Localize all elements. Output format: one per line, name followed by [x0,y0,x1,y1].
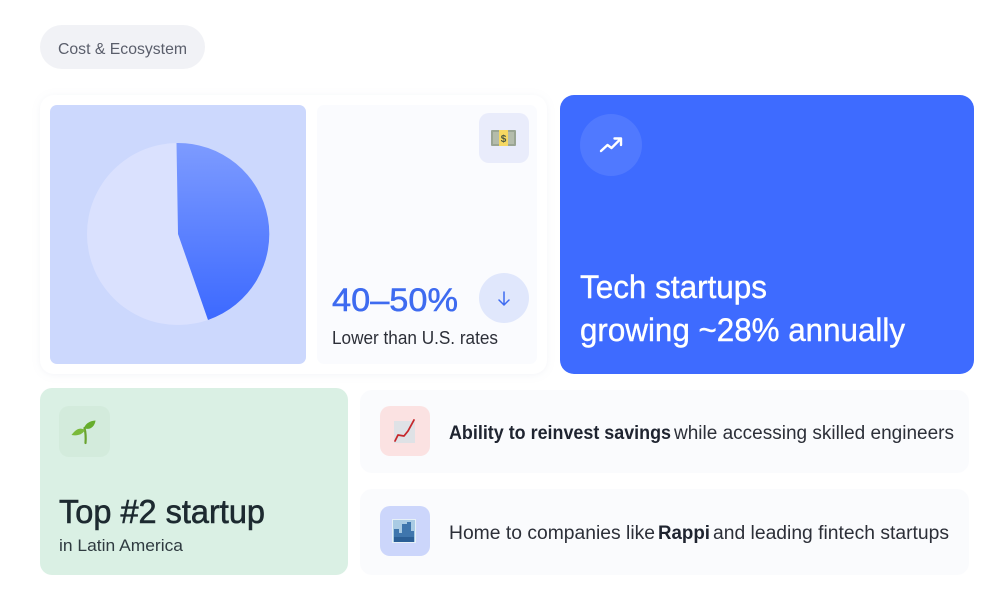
subheading: in Latin America [59,536,184,555]
headline: Tech startups [580,269,767,305]
headline: Top #2 startup [59,493,265,530]
text: and leading fintech startups [713,523,949,544]
headline [580,269,905,348]
panel: savings stat [317,105,537,364]
icon: trending up [580,114,642,176]
panel: top startup ranking [40,388,348,575]
text: Rappi [658,523,710,544]
stat caption: Lower than U.S. rates [332,328,498,348]
icon: banknote: $ [501,134,507,145]
icon: seedling [59,406,110,457]
category pill: Cost & Ecosystem [58,41,187,58]
panel: pie chart background [50,105,306,364]
panel: tech startups growth [560,95,974,374]
headline: growing ~28% annually [580,312,905,348]
panel: reinvest savings [360,390,969,473]
icon: chart [380,406,430,456]
text: while accessing skilled engineers [673,423,954,444]
icon: banknote [479,113,529,163]
text [449,523,949,544]
pie chart [87,143,269,325]
category pill [40,25,205,69]
text: Ability to reinvest savings [449,423,671,444]
icon: down arrow [479,273,529,323]
icon: cityscape [380,506,430,556]
text [449,423,954,444]
text: Home to companies like [449,523,655,544]
panel: company examples [360,489,969,575]
panel: cost comparison card [40,95,547,374]
stat value: 40–50% [332,282,458,318]
